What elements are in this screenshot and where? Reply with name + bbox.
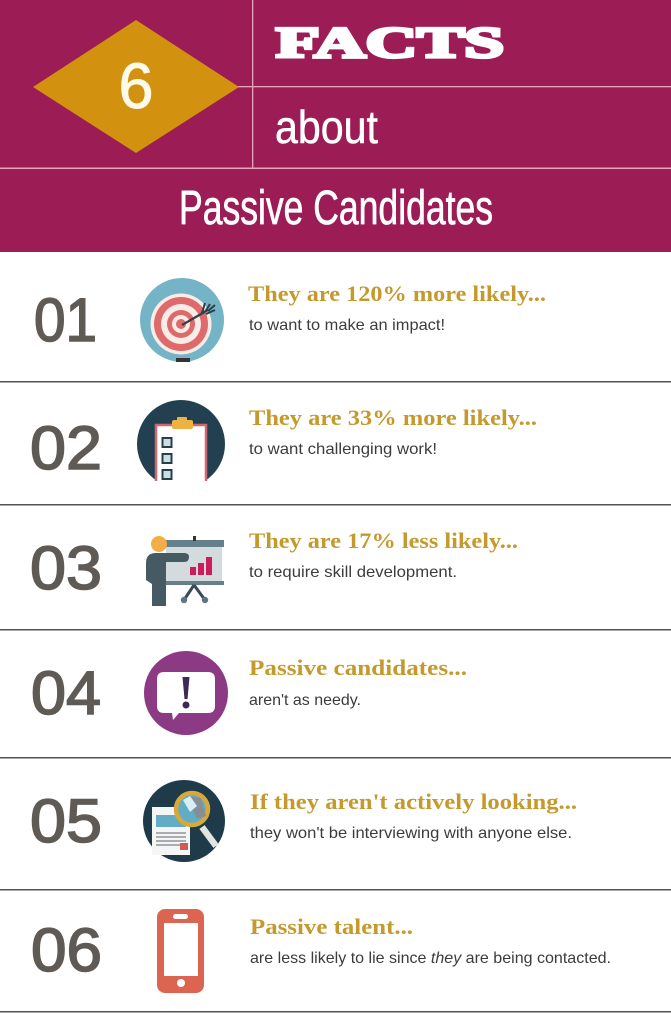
fact title: They are 17% less likely... (249, 528, 518, 553)
heading: FACTS: FACTS (276, 20, 504, 67)
fact 03 (30, 528, 518, 606)
number 03: 03 (30, 534, 102, 602)
divider (0, 889, 671, 890)
fact title: They are 33% more likely... (249, 405, 537, 430)
fact description: aren't as needy. (249, 692, 361, 709)
fact title: Passive talent... (250, 914, 413, 939)
number 01: 01 (34, 286, 97, 354)
icon: magnifier over document (143, 780, 225, 862)
fact 05 (30, 780, 577, 862)
fact description: are less likely to lie since they are being contacted. (250, 950, 611, 967)
divider (0, 381, 671, 382)
icon: speech bubble exclamation (144, 651, 228, 735)
fact description: they won't be interviewing with anyone else. (250, 825, 572, 842)
number 05: 05 (30, 787, 102, 855)
divider (0, 629, 671, 630)
number 04: 04 (31, 659, 101, 727)
icon: gold diamond with 6 (33, 20, 239, 153)
fact description: to want to make an impact! (249, 317, 445, 334)
divider (0, 757, 671, 758)
icon: clipboard checklist (137, 400, 225, 490)
divider (0, 1011, 671, 1012)
fact title: They are 120% more likely... (248, 281, 546, 306)
fact 06 (31, 909, 611, 993)
icon: target (140, 278, 224, 362)
icon: smartphone (157, 909, 204, 993)
fact title: Passive candidates... (249, 655, 467, 680)
icon: presenter with chart (146, 536, 224, 606)
icon: gold diamond with 6: 6 (118, 50, 154, 122)
number 06: 06 (31, 916, 102, 984)
fact description: to require skill development. (249, 564, 457, 581)
fact description: to want challenging work! (249, 441, 437, 458)
fact 04 (31, 651, 467, 735)
divider (0, 504, 671, 506)
fact 01 (34, 278, 546, 362)
header banner (0, 0, 671, 252)
fact title: If they aren't actively looking... (250, 789, 577, 814)
number 02: 02 (30, 414, 102, 482)
heading: about: about (275, 101, 378, 153)
fact 02 (30, 400, 537, 490)
heading: Passive Candidates: Passive Candidates (179, 182, 493, 235)
